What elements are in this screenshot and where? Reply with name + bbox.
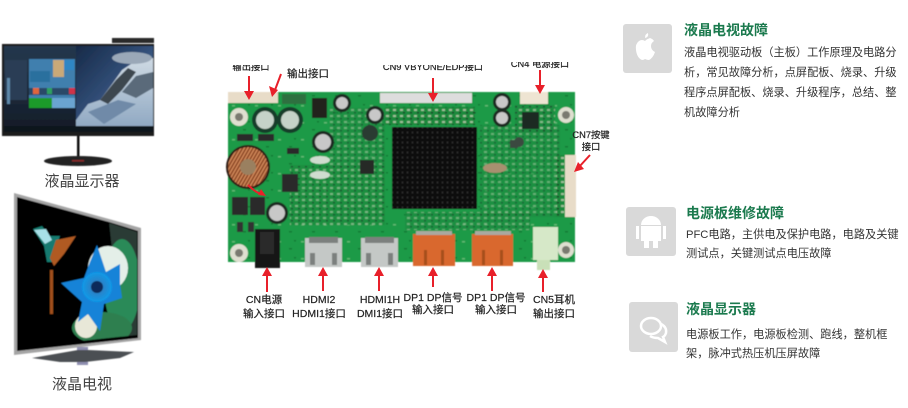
monitor illustration bbox=[2, 38, 154, 166]
board label: CN5: 输出接口 bbox=[533, 307, 575, 320]
icon: android tile bbox=[626, 207, 676, 256]
text: TV faults description: 程序点屏配板、烧录、升级程序，总结、整 bbox=[684, 85, 897, 99]
television illustration bbox=[14, 193, 141, 365]
text: TV faults description: 机故障分析 bbox=[684, 105, 740, 119]
icon: chat tile bbox=[629, 302, 678, 352]
board labels: clipped top labels: 输出接口 bbox=[232, 61, 270, 72]
board label: DP two: 输入接口 bbox=[475, 303, 517, 316]
text: TV faults description: 液晶电视驱动板（主板）工作原理及电路分 bbox=[684, 45, 897, 59]
heading: monitor: 液晶显示器 bbox=[686, 301, 756, 317]
board label: CN7: 接口 bbox=[582, 141, 600, 152]
board labels: clipped top labels bbox=[232, 65, 482, 72]
text: power board description bbox=[686, 227, 899, 260]
text: monitor description: 架，脉冲式热压机压屏故障 bbox=[686, 346, 820, 360]
board label: HDMI1: HDMI1H bbox=[360, 294, 400, 306]
board label: DP one: DP1 DP信号 bbox=[404, 292, 462, 304]
board label: power input: CN电源 bbox=[246, 294, 282, 306]
board label: output port: 输出接口 bbox=[287, 67, 329, 80]
board label: HDMI2: HDMI2 bbox=[303, 294, 335, 306]
board label: power input: 输入接口 bbox=[243, 307, 285, 320]
text: TV faults description bbox=[684, 45, 897, 119]
heading: TV faults: 液晶电视故障 bbox=[684, 22, 768, 38]
text: power board description: PFC电路，主供电及保护电路，电路及关键 bbox=[686, 227, 899, 241]
board label: clipped CN4: CN4 电源接口 bbox=[511, 58, 569, 69]
board label: CN7: CN7按键 bbox=[572, 130, 610, 140]
board label: DP one: 输入接口 bbox=[412, 303, 454, 316]
circuit board photo bbox=[226, 92, 576, 270]
text: monitor description bbox=[686, 327, 887, 360]
board label: CN5: CN5耳机 bbox=[533, 294, 575, 306]
text: TV faults description: 析，常见故障分析，点屏配板、烧录、升级 bbox=[684, 65, 897, 79]
icon: apple tile bbox=[623, 24, 672, 73]
red callout arrows bbox=[244, 70, 590, 292]
board label: HDMI1: DMI1接口 bbox=[357, 307, 403, 320]
text: power board description: 测试点，关键测试点电压故障 bbox=[686, 246, 831, 260]
board label: DP two: DP1 DP信号 bbox=[467, 292, 525, 304]
heading: power board faults: 电源板维修故障 bbox=[686, 205, 784, 221]
caption: television: 液晶电视 bbox=[52, 376, 112, 393]
board labels: clipped top labels: CN9 VBYONE/EDP接口 bbox=[383, 61, 483, 72]
caption: monitor: 液晶显示器 bbox=[44, 173, 120, 190]
board label: HDMI2: HDMI1接口 bbox=[292, 307, 346, 320]
text: monitor description: 电源板工作，电源板检测、跑线，整机框 bbox=[686, 327, 887, 341]
